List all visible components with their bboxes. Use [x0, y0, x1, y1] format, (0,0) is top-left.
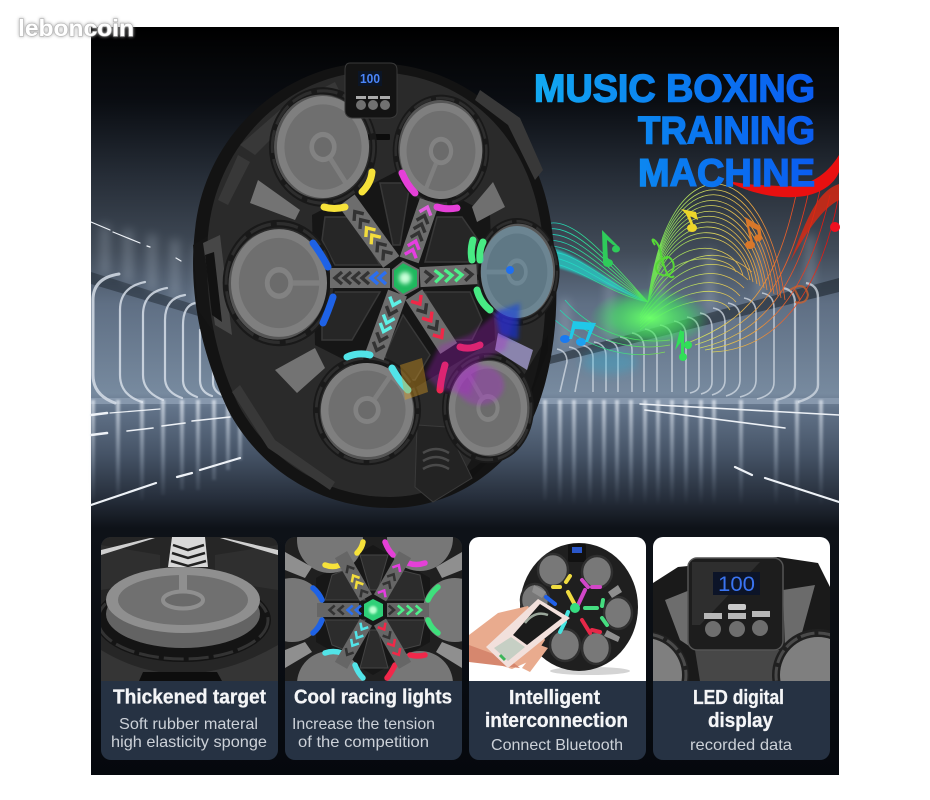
- card: intelligent interconnection: Intelligent: [509, 687, 600, 709]
- note blue: [560, 321, 596, 346]
- card: LED digital display: recorded data: [690, 737, 792, 754]
- note yellow: [681, 209, 698, 232]
- arena background: ribs and floor: [91, 222, 839, 505]
- title: [534, 68, 815, 195]
- card: cool racing lights: Cool racing lights: [294, 686, 452, 708]
- card: LED digital display: LED digital: [693, 687, 784, 709]
- strike pads: [226, 69, 557, 482]
- card photo: light ring: [285, 537, 462, 681]
- sound wave ribbons and music notes: [515, 155, 840, 374]
- speaker slot: [368, 134, 390, 140]
- card: cool racing lights: Increase the tension: [292, 716, 435, 733]
- display module: 100: [360, 71, 380, 86]
- boxing machine: [193, 63, 557, 508]
- light arms with chevrons: [330, 194, 477, 360]
- glow at wave crossing: [590, 288, 710, 348]
- card: intelligent interconnection: Connect Bluetooth: [491, 737, 623, 754]
- lower chevron tab: [415, 425, 472, 502]
- color burst overlay: [400, 226, 553, 405]
- note green lower: [675, 330, 692, 361]
- note faint orange: [790, 286, 808, 303]
- center hexagon light: [393, 262, 418, 295]
- title: MUSIC BOXING: [534, 68, 815, 110]
- display module: [345, 63, 397, 118]
- card photo: phone and machine: [469, 537, 646, 681]
- red ribbon: [725, 155, 839, 197]
- card: cool racing lights: of the competition: [298, 734, 429, 751]
- note green: [602, 230, 620, 267]
- colored LED bars: [313, 172, 490, 390]
- card: cool racing lights: [285, 537, 462, 760]
- card photo: thick pad: [95, 537, 278, 681]
- card: intelligent interconnection: interconnection: [485, 710, 628, 732]
- card: LED digital display: [653, 537, 830, 760]
- main photo background: [91, 27, 839, 775]
- card: thickened target: Thickened target: [113, 686, 266, 708]
- title: MACHINE: [638, 152, 815, 195]
- title: TRAINING: [638, 110, 815, 152]
- card: intelligent interconnection: [469, 537, 646, 760]
- rainbow mesh waves: [535, 184, 838, 355]
- triangle strike buttons: [250, 180, 533, 393]
- watermark logo: leboncoin: [18, 15, 134, 41]
- central hub panel: [312, 168, 495, 392]
- card: LED digital display: display: [708, 710, 774, 732]
- card: thickened target: high elasticity sponge: [111, 734, 267, 751]
- card: thickened target: Soft rubber materal: [119, 716, 258, 733]
- card: thickened target: [95, 537, 278, 760]
- card photo: display close-up: [653, 537, 830, 681]
- machine body: [193, 63, 556, 508]
- treble clef: [653, 240, 674, 277]
- note orange: [745, 217, 762, 249]
- card photo: display close-up: 100: [718, 573, 755, 596]
